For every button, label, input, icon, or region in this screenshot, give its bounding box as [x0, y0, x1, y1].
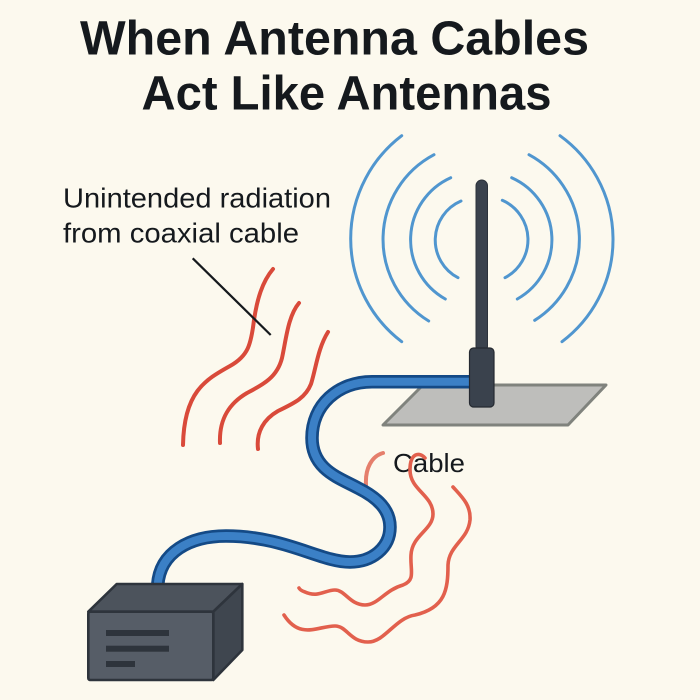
antenna: [470, 180, 494, 407]
transmitter box: [88, 584, 242, 680]
lower radiation waves: [284, 453, 470, 642]
upper radiation waves: [183, 269, 328, 449]
title: Act Like Antennas: [142, 68, 552, 120]
box front panel lines: [106, 630, 169, 667]
callout: unintended radiation label: Unintended radiation: [63, 182, 331, 214]
coaxial cable: [158, 382, 472, 585]
ground plate: [383, 385, 606, 425]
title: [80, 12, 589, 120]
radio waves from antenna: [351, 136, 613, 342]
title: When Antenna Cables: [80, 12, 589, 66]
leader line: [193, 258, 271, 335]
cable label: Cable: [393, 448, 465, 478]
callout: unintended radiation label: [63, 182, 331, 248]
callout: unintended radiation label: from coaxial cable: [63, 218, 299, 248]
